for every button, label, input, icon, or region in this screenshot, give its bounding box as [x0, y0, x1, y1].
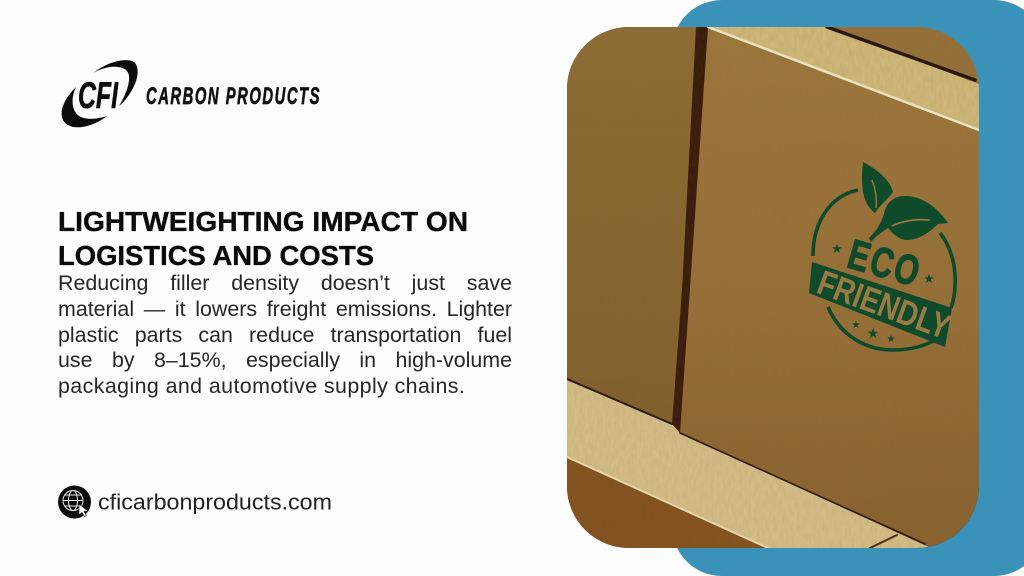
stamp stars: ★	[831, 242, 843, 257]
body paragraph	[58, 271, 512, 398]
logo wordmark: CARBON PRODUCTS	[146, 83, 321, 110]
back box corner	[827, 27, 979, 84]
left box	[567, 27, 696, 424]
logo swoosh	[62, 60, 138, 127]
stamp banner	[809, 262, 952, 347]
body paragraph: Reducing filler density doesn’t just save	[58, 271, 512, 295]
title: LIGHTWEIGHTING IMPACT ON	[58, 206, 468, 237]
stamp word: FRIENDLY: FRIENDLY	[812, 263, 955, 347]
photo: cardboard boxes	[567, 27, 979, 576]
stamp word: ECO: ECO	[843, 230, 927, 296]
top flap	[708, 27, 979, 130]
shelf	[567, 378, 928, 548]
stamp stars: ★	[852, 320, 861, 331]
texture	[567, 27, 979, 548]
stamp stars: ★	[923, 272, 935, 287]
title	[58, 206, 468, 271]
body paragraph: packaging and automotive supply chains.	[58, 374, 465, 398]
logo letters CFI: CFI	[78, 75, 118, 116]
stamp ring	[813, 190, 955, 350]
stamp stars	[831, 242, 935, 345]
photo base	[567, 27, 979, 548]
body paragraph: use by 8–15%, especially in high-volume	[58, 348, 512, 372]
leaves	[862, 162, 948, 242]
blue backing panel	[672, 0, 1024, 576]
website row	[58, 486, 332, 518]
body paragraph: plastic parts can reduce transportation fuel	[58, 322, 512, 346]
icon: globe with cursor	[58, 486, 91, 518]
logo	[62, 60, 321, 127]
website url: cficarbonproducts.com	[98, 490, 332, 514]
title: LOGISTICS AND COSTS	[58, 240, 374, 271]
stamp stars: ★	[867, 326, 879, 342]
dark seam lines	[567, 27, 979, 548]
body paragraph: material — it lowers freight emissions. Lighter	[58, 297, 512, 321]
lower brown box	[567, 457, 768, 548]
stamp stars: ★	[887, 334, 896, 345]
eco friendly stamp	[809, 162, 955, 350]
right box front face	[680, 27, 979, 570]
